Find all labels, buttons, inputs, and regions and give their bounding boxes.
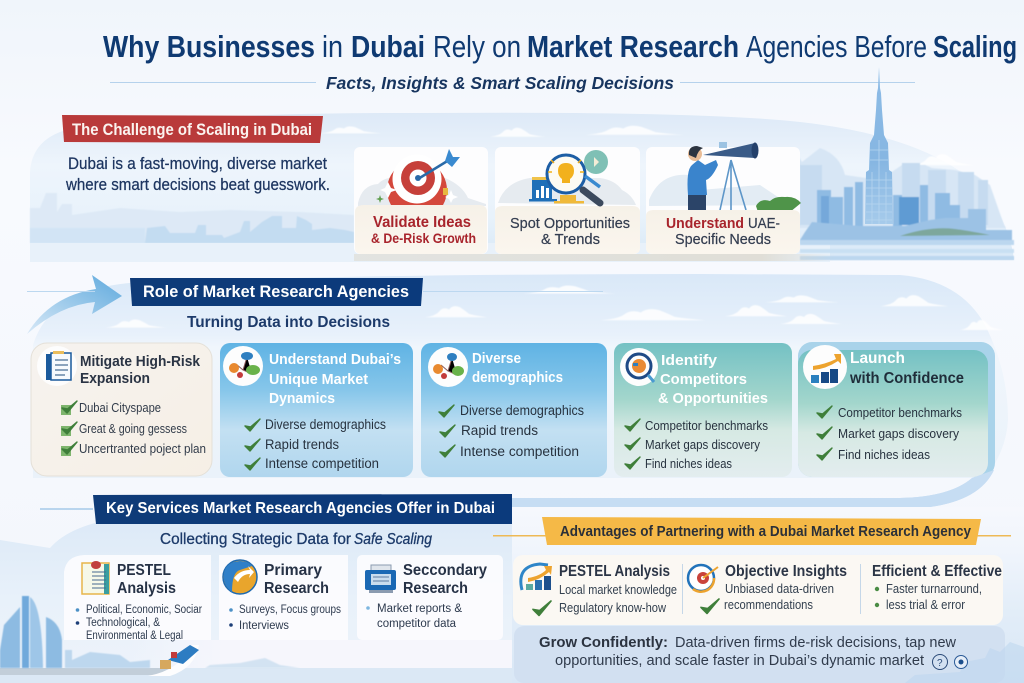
- right skyline: [755, 148, 1014, 260]
- panel: key services background: [0, 508, 1011, 683]
- advantage: objective insights: Unbiased data-driven: [725, 582, 834, 596]
- icon: clipboard: [82, 561, 109, 594]
- bullet list: competitor data: [377, 618, 457, 630]
- icon: magnifier with bulb and chart: [529, 150, 608, 204]
- panel: advantages background: [512, 470, 1024, 683]
- bullet list: Surveys, Focus groups: [239, 604, 341, 616]
- panel: challenge of scaling: [30, 67, 1014, 262]
- checklist: Market gaps discovery: [838, 426, 959, 441]
- title: Rely on: [433, 29, 521, 64]
- icon: printer report: [365, 565, 396, 593]
- checklist: [245, 417, 386, 471]
- title: in: [322, 29, 343, 64]
- card: spot opportunities: [495, 147, 640, 254]
- card: launch with confidence: with Confidence: [849, 370, 964, 387]
- section bar: key services: [93, 494, 512, 524]
- title: Market Research: [527, 29, 739, 64]
- section bar: role: [130, 278, 603, 306]
- advantage: efficient and effective: less trial & error: [886, 598, 965, 612]
- bullet list: Technological, &: [86, 617, 160, 629]
- card: primary research: Primary: [264, 562, 322, 579]
- checklist: Rapid trends: [265, 437, 339, 452]
- panel: grow confidently: [514, 626, 1024, 683]
- title: Why Businesses: [103, 29, 315, 64]
- card: dubai market dynamics: Unique Market: [269, 371, 368, 388]
- water strip left: [30, 243, 830, 262]
- bullet list: Market reports &: [377, 603, 462, 615]
- card: validate ideas: & De-Risk Growth: [371, 231, 476, 246]
- card: PESTEL analysis: PESTEL: [117, 562, 171, 579]
- checklist: Find niches ideas: [838, 447, 930, 462]
- title: Agencies Before: [746, 29, 927, 64]
- icon: growth chart: [803, 345, 847, 389]
- bullet list: [76, 604, 202, 642]
- arrow: role section: [27, 275, 122, 334]
- checklist: Intense competition: [460, 444, 579, 459]
- advantage: efficient and effective: [872, 563, 1002, 612]
- section tag: challenge: [62, 115, 323, 143]
- icon: nodes: [223, 346, 263, 386]
- advantage: efficient and effective: Efficient & Effective: [872, 563, 1002, 580]
- advantage: PESTEL analysis: Local market knowledge: [559, 583, 677, 597]
- checklist: Diverse demographics: [265, 417, 386, 432]
- card: understand UAE needs: [646, 142, 801, 254]
- card: secondary research: Seccondary: [403, 562, 487, 579]
- clouds in challenge panel: [320, 126, 974, 165]
- card: dubai market dynamics: Understand Dubai’s: [269, 351, 401, 368]
- panel: grow confidently: Data-driven firms de-risk decisions, tap new: [675, 634, 956, 651]
- checklist: [61, 401, 206, 456]
- subheading: collecting strategic data: Safe Scaling: [354, 531, 432, 548]
- text: challenge description: where smart decisions beat guesswork.: [65, 175, 330, 194]
- section bar: key services: Key Services Market Research Agencies Offer in Dubai: [106, 500, 495, 517]
- checklist: Competitor benchmarks: [645, 418, 768, 433]
- icon: question mark: [932, 654, 948, 670]
- card: understand UAE needs: Specific Needs: [675, 231, 771, 248]
- icon: globe: [223, 560, 257, 594]
- card: spot opportunities: Spot Opportunities: [510, 215, 630, 232]
- card: competitors and opportunities: [614, 343, 792, 477]
- card: competitors and opportunities: Competitors: [660, 371, 747, 388]
- section bar: role: Role of Market Research Agencies: [143, 283, 409, 301]
- subtitle: Facts, Insights & Smart Scaling Decisions: [326, 73, 674, 93]
- icon: clipboard: [37, 346, 77, 386]
- card: mitigate high-risk: Mitigate High-Risk: [80, 353, 201, 370]
- text: challenge description: [65, 154, 330, 194]
- card: competitors and opportunities: & Opportunities: [658, 390, 768, 407]
- card: primary research: Research: [264, 580, 329, 597]
- checklist: Rapid trends: [461, 423, 538, 438]
- icon: target: [688, 565, 718, 592]
- bullet list: Political, Economic, Sociar: [86, 604, 202, 616]
- card: diverse demographics: [421, 343, 607, 477]
- subheading: turning data: Turning Data into Decisions: [187, 314, 390, 331]
- icon: growth chart: [521, 564, 552, 590]
- title: [103, 29, 1017, 64]
- checklist: Competitor benchmarks: [838, 405, 962, 420]
- card: dubai market dynamics: Dynamics: [269, 390, 335, 407]
- panel: role of agencies: [33, 274, 1008, 507]
- panel: advantages cards: [513, 555, 1003, 625]
- card: spot opportunities: & Trends: [541, 231, 600, 248]
- text: challenge description: Dubai is a fast-moving, diverse market: [68, 154, 327, 173]
- card: secondary research: [357, 555, 503, 640]
- card: launch with confidence: [798, 342, 995, 477]
- checklist: Uncertranted poject plan: [79, 442, 206, 456]
- bullet list: [366, 603, 462, 630]
- card: understand UAE needs: UAE-: [748, 215, 780, 232]
- swoosh connecting to next section: [512, 470, 994, 507]
- icon: person with telescope: [688, 142, 801, 212]
- card: mitigate high-risk: Expansion: [80, 370, 150, 387]
- checklist: Find niches ideas: [645, 456, 732, 471]
- title: Dubai: [351, 29, 425, 64]
- card: secondary research: Research: [403, 580, 468, 597]
- card: diverse demographics: Diverse: [472, 350, 521, 367]
- panel bottom shadow: [354, 254, 834, 261]
- icon: nodes: [428, 347, 468, 387]
- bullet list: Environmental & Legal: [86, 630, 183, 642]
- checklist: Intense competition: [265, 456, 379, 471]
- bullet list: Interviews: [239, 620, 289, 632]
- advantage: PESTEL analysis: Regulatory know-how: [559, 601, 667, 615]
- Burj Khalifa tower: [865, 67, 893, 224]
- section tag: challenge: The Challenge of Scaling in Dubai: [72, 120, 312, 139]
- checklist: Great & going gessess: [79, 422, 187, 436]
- panel: grow confidently: opportunities, and scale faster in Dubai’s dynamic market: [555, 652, 925, 669]
- advantage: objective insights: [688, 563, 847, 613]
- card: diverse demographics: demographics: [472, 369, 563, 386]
- advantage: objective insights: Objective Insights: [725, 563, 847, 580]
- panel: grow confidently: Grow Confidently:: [539, 634, 668, 651]
- advantage: objective insights: recommendations: [724, 598, 813, 612]
- card: PESTEL analysis: [64, 555, 211, 642]
- advantage: PESTEL analysis: [521, 563, 677, 615]
- card: launch with confidence: Launch: [850, 350, 905, 367]
- checklist: [817, 405, 962, 462]
- icon: radio dot: [954, 656, 968, 668]
- illustration: boat: [148, 645, 199, 676]
- icon: question mark: ?: [937, 658, 943, 669]
- card: mitigate high-risk: [31, 343, 212, 476]
- bullet list: [229, 604, 341, 632]
- card: validate ideas: Validate Ideas: [373, 214, 471, 231]
- checklist: [439, 403, 584, 459]
- clouds in role panel: [105, 286, 1003, 330]
- card: dubai market dynamics: [220, 343, 413, 477]
- card: competitors and opportunities: Identify: [661, 352, 718, 369]
- advantage: PESTEL analysis: PESTEL Analysis: [559, 563, 670, 580]
- left skyline: [30, 193, 354, 243]
- advantage: efficient and effective: Faster turnarround,: [886, 582, 982, 596]
- icon: target with dart: [376, 149, 460, 205]
- card: primary research: [219, 555, 348, 640]
- card: validate ideas: [354, 147, 488, 254]
- card: understand UAE needs: Understand: [666, 215, 744, 232]
- section bar: advantages: [542, 517, 981, 545]
- checklist: Diverse demographics: [460, 403, 584, 418]
- left bottom skyline: [0, 596, 300, 668]
- checklist: Market gaps discovery: [645, 437, 761, 452]
- icon: magnifier target: [620, 348, 658, 386]
- section bar: advantages: Advantages of Partnering with a Dubai Market Research Agency: [560, 524, 971, 540]
- subheading: collecting strategic data: Collecting Strategic Data for: [160, 531, 351, 548]
- card: PESTEL analysis: Analysis: [117, 580, 176, 597]
- checklist: Dubai Cityspape: [79, 401, 161, 415]
- checklist: [625, 418, 768, 471]
